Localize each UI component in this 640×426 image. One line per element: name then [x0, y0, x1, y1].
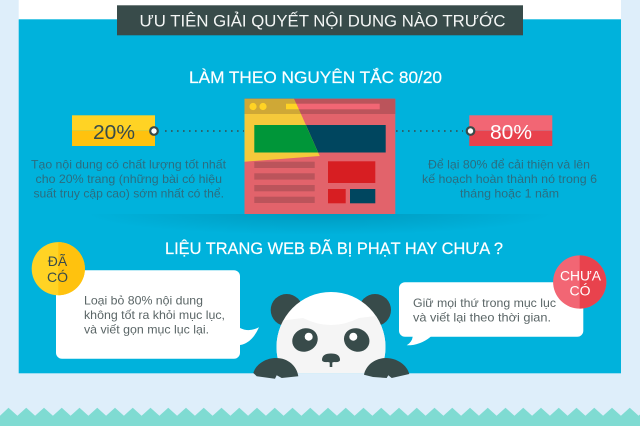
- connector right: [396, 127, 474, 135]
- badge: yes: ĐÃ: [48, 253, 68, 269]
- badge: not yet: CÓ: [570, 283, 591, 299]
- 20% label: 20%: [93, 122, 135, 144]
- panel: blue main panel: [19, 19, 621, 373]
- speech bubble: yes: Loại bỏ 80% nội dung: [84, 294, 203, 308]
- title banner: ƯU TIÊN GIẢI QUYẾT NỘI DUNG NÀO TRƯỚC: [140, 12, 506, 31]
- 80% label: 80%: [490, 122, 532, 144]
- badge: not yet: [553, 255, 606, 309]
- text: 80% description: Để lại 80% để cải thiện và lên: [428, 158, 590, 172]
- speech bubble: yes: và viết gọn mục lục lại.: [84, 322, 209, 336]
- badge: not yet: CHƯA: [560, 268, 602, 284]
- heading: penalty question: LIỆU TRANG WEB ĐÃ BỊ PHẠT HAY CHƯA ?: [165, 239, 503, 258]
- speech bubble: not yet: và viết lại theo thời gian.: [413, 310, 551, 324]
- connector left: [150, 127, 244, 135]
- zigzag teal footer: [0, 408, 640, 426]
- 80% label: [469, 115, 552, 146]
- speech bubble: not yet: [399, 282, 583, 345]
- text: 80% description: tháng hoặc 1 năm: [460, 186, 559, 200]
- text: 80% description: kế hoạch hoàn thành nó trong 6: [422, 172, 597, 186]
- text: 20% description: [31, 158, 227, 200]
- heading: 80/20 rule: LÀM THEO NGUYÊN TẮC 80/20: [189, 68, 442, 87]
- text: 20% description: Tạo nội dung có chất lượng tốt nhất: [31, 158, 227, 172]
- text: 20% description: suất truy cập cao) sớm nhất có thể.: [34, 186, 224, 200]
- title banner: [117, 5, 523, 35]
- browser shadow: [150, 214, 490, 229]
- speech bubble: yes: không tốt ra khỏi mục lục,: [84, 308, 225, 322]
- badge: yes: [32, 242, 85, 295]
- icon: panda: [253, 292, 410, 379]
- speech bubble: not yet: Giữ mọi thứ trong mục lục: [413, 296, 556, 310]
- 20% label: [72, 115, 155, 146]
- text: 20% description: cho 20% trang (những bài có hiệu: [36, 172, 222, 186]
- icon: browser window: [244, 99, 395, 214]
- text: 80% description: [422, 158, 597, 200]
- white top strip: [19, 0, 621, 20]
- badge: yes: CÓ: [47, 269, 68, 285]
- speech bubble: yes: [56, 270, 259, 359]
